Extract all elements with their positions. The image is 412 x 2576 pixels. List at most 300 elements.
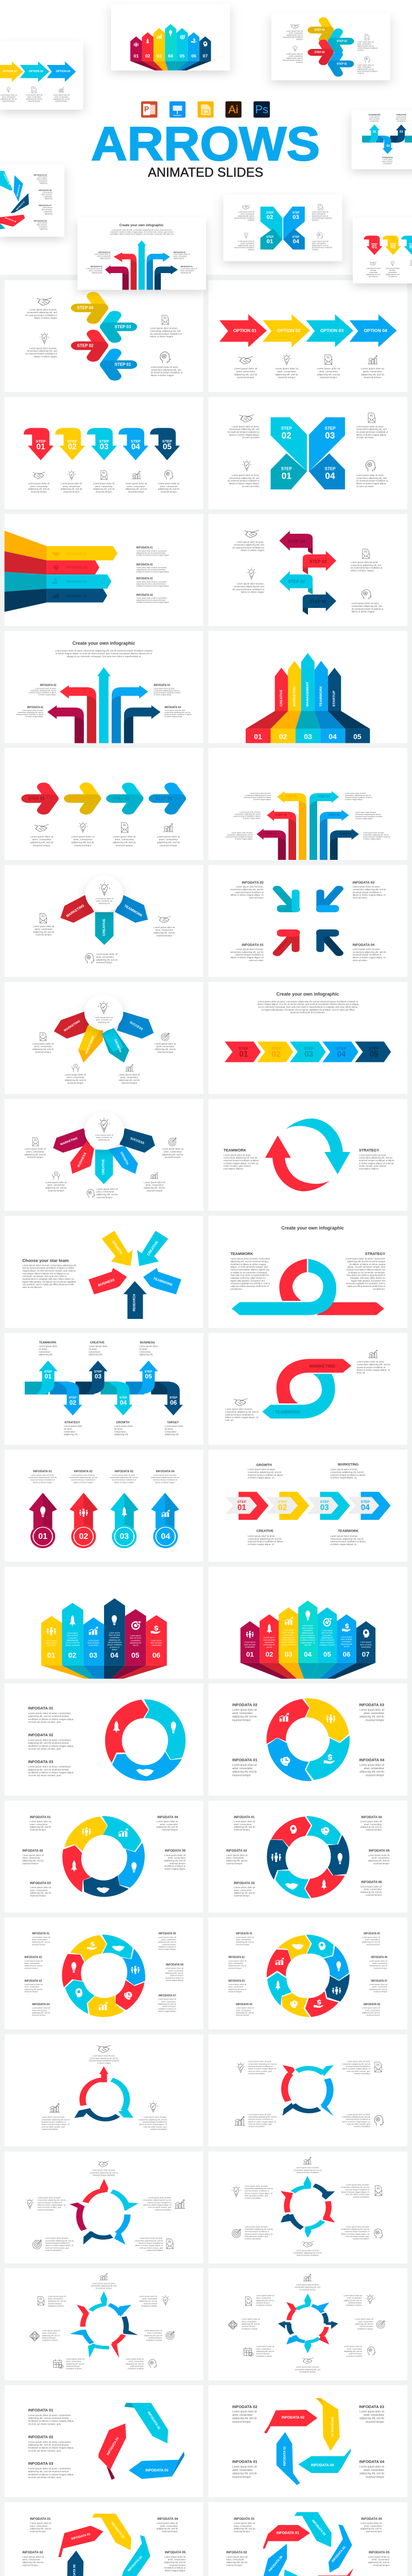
arrowheads: [70, 2179, 139, 2245]
text blocks: Lorem ipsum dolor sit amet, consectetur adipiscing elit, sed do eiusmod tempor: [368, 2555, 389, 2566]
arrows: chevrons: [312, 21, 349, 73]
chart: five columns: [246, 653, 370, 743]
chart: folded X: 01: [282, 470, 291, 481]
chart: ribbons: INFODATA 05: [3, 174, 10, 185]
headings and text: Lorem ipsum dolor sit amet, consectetur adipiscing elit, sed do eiusmod tempor incididunt ut labore et dolore magna aliqua. Ut enim ad minim: [230, 948, 264, 961]
icons and text blocks: Lorem ipsum dolor sit amet, consectetur adipiscing elit, sed do eiusmod tempor incididunt ut labore: [256, 2295, 274, 2307]
icons and text blocks: Lorem ipsum dolor sit amet, consectetur adipiscing elit, sed do eiusmod tempor incididunt ut labore: [126, 2358, 144, 2370]
headings and text: TEAMWORK: [39, 1341, 57, 1344]
icons and text blocks: Lorem ipsum dolor sit amet, consectetur adipiscing elit, sed do eiusmod tempor incididunt ut labore: [344, 2295, 362, 2307]
arrows: five converging: CREATIVE: [147, 1240, 159, 1257]
text blocks: Lorem ipsum dolor sit amet, consectetur adipiscing elit, sed do eiusmod tempor incididunt ut labore et dolore magna aliqua.: [164, 1854, 185, 1870]
icons and text blocks: [42, 2045, 167, 2130]
headings and text: GROWTH: [256, 1463, 272, 1467]
text blocks: INFODATA 02: [226, 2551, 247, 2554]
chart: ribbons: INFODATA 02: [282, 2416, 304, 2419]
arrowheads: [278, 2294, 338, 2353]
text blocks: Lorem ipsum dolor sit amet, consectetur adipiscing elit, sed do eiusmod tempor incididunt ut labore et dolore magna aliqua.: [355, 811, 383, 820]
chart: ribbons: INFODATA 06: [268, 2555, 284, 2572]
icons and text blocks: Lorem ipsum dolor sit amet, consectetur adipiscing elit, sed do eiusmod tempor incididunt ut labore et dolore magna aliqua. Ut enim ad minim veniam, quis nostrud exercitation: [134, 2238, 163, 2251]
chart: four perspective bands: [5, 531, 117, 612]
panel: slide 9 step chevrons: [5, 748, 203, 860]
text blocks: Lorem ipsum dolor sit amet, consectetur adipiscing elit, sed do eiusmod tempor: [24, 1984, 42, 1993]
arrows: five branches: [47, 667, 161, 743]
chart: six columns: Lorem ipsum dolor sit amet, consectetur: [45, 1639, 58, 1647]
text blocks: [224, 1148, 395, 1170]
text blocks: INFODATA 01: [30, 2517, 51, 2521]
arrows: five converging: GROWTH: [111, 1240, 123, 1255]
panel: slide 12 inward arrows: [209, 865, 407, 977]
text blocks: Lorem ipsum dolor sit amet, consectetur adipiscing elit, sed do eiusmod tempor: [157, 2522, 178, 2533]
icon: PowerPoint: [141, 101, 158, 117]
icons and text blocks: Lorem ipsum dolor sit amet, consectetur adipiscing elit, sed do eiusmod tempor incididunt ut labore: [357, 41, 377, 52]
text blocks: INFODATA 06: [166, 1963, 183, 1967]
icons and text blocks: Lorem ipsum dolor sit amet, consectetur adipiscing elit, sed do eiusmod tempor incididunt ut labore et dolore magna aliqua. Ut enim ad: [357, 1361, 390, 1374]
chart: six columns: Lorem ipsum dolor sit amet, consectetur: [88, 1639, 99, 1647]
icons and text blocks: Lorem ipsum dolor sit amet, consectetur adipiscing elit, sed do eiusmod tempor incididunt ut labore et dolore magna aliqua. Ut enim ad minim veniam, quis nostrud exercitation: [143, 2197, 171, 2211]
text blocks: [226, 1816, 390, 1897]
icons and text blocks: Lorem ipsum dolor sit amet, consectetur adipiscing elit, sed do eiusmod tempor incididunt ut labore: [48, 2295, 66, 2307]
labels: Lorem ipsum dolor sit amet, consectetur adipiscing elit, sed do eiusmod tempor incididunt ut labore et dolore magna aliqua.: [29, 688, 56, 696]
panel: slide 36 eight-arrow circle: [209, 2268, 407, 2380]
chart: X: 02: [267, 214, 273, 221]
icons and text blocks: Lorem ipsum dolor sit amet, consectetur adipiscing elit, sed do eiusmod tempor incididunt ut labore: [42, 2330, 60, 2342]
icons and text blocks: Lorem ipsum dolor sit amet, consectetur adipiscing elit, sed do eiusmod tempor incididunt ut labore et dolore magna: [352, 602, 383, 613]
text blocks: STRATEGY: [382, 156, 393, 159]
text blocks: INFODATA 01: [32, 1933, 49, 1936]
labels: INFODATA 02: [98, 251, 110, 253]
chart: ribbons: [264, 2398, 351, 2485]
chart: three petals around circle: Lorem ipsum dolor sit amet, consecte- tur adipiscing elit,: [95, 897, 113, 905]
icons and text blocks: Lorem ipsum dolor sit amet, consectetur adipiscing elit, sed do eiusmod tempor incididunt ut labore: [283, 53, 303, 63]
arrows: five converging: RESEARCH: [133, 1294, 136, 1311]
arrows: four options: OPTION 03: [320, 328, 344, 333]
text blocks: Lorem ipsum dolor sit amet, consectetur adipiscing elit, sed do eiusmod tempor: [22, 2555, 44, 2566]
icon: Illustrator: [226, 101, 242, 117]
chart: ribbons: INFODATA 02: [110, 2522, 125, 2539]
chart: seven columns: 03: [285, 1650, 293, 1658]
icons and text blocks: [26, 470, 182, 493]
text blocks: INFODATA 06: [371, 1956, 387, 1959]
arrows: four options: OPTION 04: [364, 328, 387, 333]
icons and text blocks: Lorem ipsum dolor sit amet, consectetur adipiscing elit, sed do eiusmod tempor incididunt: [294, 2249, 322, 2257]
chart: weaving band with six arrows: 05: [145, 1373, 152, 1380]
icons and text blocks: [30, 913, 177, 963]
chart: five petals: MARKETING: [60, 1137, 78, 1146]
icons and text blocks: [233, 204, 333, 249]
heading: Create your own infographic: [281, 1226, 344, 1231]
text blocks: Lorem ipsum dolor sit amet, consectetur adipiscing elit, sed do eiusmod tempor incididunt ut labore et dolore magna aliqua. Ut enim ad minim veniam, quis: [28, 2467, 74, 2479]
chart: seven columns: 02: [266, 1650, 273, 1658]
icons and text blocks: Lorem ipsum dolor sit amet, consectetur adipiscing elit, sed do eiusmod tempor: [32, 1042, 54, 1053]
chart: five columns: CREATIVE: [280, 689, 283, 707]
panel: slide 18 interlock arrows: [209, 1216, 407, 1328]
text blocks: Lorem ipsum dolor sit amet, consectetur adipiscing elit, sed do eiusmod tempor incididunt ut labore et dolore magna aliqua.: [226, 832, 253, 840]
chart: fan: 04: [168, 54, 173, 59]
panel: hero card X shape: [224, 195, 342, 261]
arrows: eight arcs: [289, 2306, 327, 2342]
labels: Lorem ipsum dolor sit amet, consectetur adipiscing elit,: [94, 253, 111, 260]
text blocks: INFODATA 02: [22, 1849, 43, 1853]
arrows: six branches: STEP 04: [318, 795, 330, 799]
arrows: five chevrons: 02: [272, 1050, 281, 1059]
text blocks: Lorem ipsum dolor sit amet, consectetur adipiscing elit, sed do eiusmod tempor incididunt ut labore et dolore magna aliqua.: [363, 832, 390, 840]
text blocks: Lorem ipsum dolor sit amet, consectetur adipiscing elit, sed do eiusmod tempor: [369, 1960, 387, 1969]
panel: hero card option arrows: [0, 41, 83, 110]
panel: hero card ribbons: [0, 164, 64, 236]
icons and text blocks: Lorem ipsum dolor sit amet, consectetur adipiscing elit, sed do eiusmod tempor: [26, 94, 42, 102]
chart: ribbons: INFODATA 03: [330, 2417, 333, 2437]
headings and text: MARKETING: [338, 1463, 358, 1466]
headings and text: INFODATA 04: [156, 1470, 175, 1473]
text blocks: TEAMWORK: [224, 1148, 247, 1153]
chart: six columns: Lorem ipsum dolor sit amet, consectetur adipiscing elit, sed do eiusmod tempor incididunt ut labore et dolore: [107, 1632, 122, 1651]
chart: folded X: STEP: [281, 426, 292, 431]
panel: slide 5 perspective bands: [5, 514, 203, 626]
text blocks: Lorem ipsum dolor sit amet, consectetur adipiscing elit, sed do eiusmod tempor: [234, 1820, 255, 1831]
text blocks: Lorem ipsum dolor sit amet, consectetur adipiscing elit, sed do eiusmod tempor: [30, 2522, 52, 2533]
text blocks: Lorem ipsum dolor sit amet, consectetur adipiscing elit, sed do eiusmod tempor: [236, 1936, 254, 1945]
text blocks: Lorem ipsum dolor sit amet, consectetur adipiscing elit, sed do eiusmod tempor: [234, 2522, 255, 2533]
chart: four petals: Lorem ipsum dolor sit amet, consecte- tur adipiscing elit,: [95, 1016, 113, 1023]
panel: hero card 7-arrow fan: [111, 4, 230, 71]
chart: folded X: 03: [325, 430, 335, 440]
chart: ring: [266, 1698, 350, 1781]
arrows: zigzag: STEP 02: [288, 579, 305, 584]
icons and text blocks: Lorem ipsum dolor sit amet, consectetur adipiscing elit, sed do eiusmod tempor: [118, 1073, 140, 1084]
arrows: five chevrons: STEP: [238, 1046, 249, 1051]
arrows: open chevrons: STEP: [237, 1500, 247, 1504]
text blocks: [232, 2404, 385, 2480]
text blocks: Lorem ipsum dolor sit amet, consectetur adipiscing elit, sed do eiusmod tempor: [362, 2007, 380, 2016]
panel: slide 31 three-arrow circle: [5, 2035, 203, 2146]
arrows: options: OPTION 03: [29, 70, 43, 73]
arrows: five chevrons: 04: [337, 1050, 346, 1059]
labels: INFODATA 01: [91, 265, 102, 267]
chart: fan: 01: [134, 54, 139, 59]
text blocks: INFODATA 03: [28, 1759, 53, 1764]
icon: PowerPoint: P: [144, 106, 149, 114]
text blocks: Lorem ipsum dolor sit amet, consectetur: [382, 159, 393, 165]
icons and text blocks: [366, 260, 412, 275]
text blocks: Lorem ipsum dolor sit amet, consectetur adipiscing elit, sed do eiusmod tempor: [360, 2522, 382, 2533]
arrows: open chevrons: 04: [361, 1503, 370, 1512]
chart: five petals: CREATIVE: [102, 1159, 106, 1175]
text blocks: INFODATA 06: [39, 189, 52, 191]
text blocks: INFODATA 04: [361, 1816, 382, 1819]
arrows: open chevrons: STEP: [320, 1500, 329, 1504]
chart: four perspective bands: INFODATA 04: [66, 595, 87, 598]
icons and text blocks: Lorem ipsum dolor sit amet, consectetur adipiscing elit, sed do eiusmod tempor incididunt ut labore et dolore magna aliqua. Ut enim ad minim veniam, quis nostrud exercitation: [245, 2185, 273, 2199]
arrows: six arcs: [287, 2185, 329, 2228]
arrowheads: [74, 2066, 133, 2118]
chart: six columns: Lorem ipsum dolor sit amet, consectetur adipiscing elit, sed do eiusmod tempor incididunt: [65, 1632, 80, 1646]
chart: X: STEP: [266, 236, 273, 239]
chart: five columns: 03: [304, 732, 312, 740]
panel: slide 17 star team arrows: [5, 1216, 203, 1328]
labels: INFODATA 03: [153, 684, 170, 687]
icons and text blocks: [234, 2060, 384, 2128]
text blocks: Lorem ipsum dolor sit amet, consectetur adipiscing elit, sed do eiusmod tempor incididunt ut labore et dolore magna aliqua.: [136, 597, 169, 603]
chart: seven columns: Lorem ipsum dolor sit amet, consectetur adipiscing elit, sed do: [340, 1636, 352, 1648]
chart: weaving band with six arrows: 01: [45, 1373, 52, 1380]
icons and text blocks: [30, 1032, 178, 1083]
arrows: two curved: [265, 1118, 350, 1191]
text blocks: INFODATA 04: [361, 2517, 382, 2521]
arrowheads: [282, 2065, 334, 2116]
headings and text: Lorem ipsum dolor sit amet, consectetur adipiscing elit, sed do eiusmod tempor incididunt ut labore et dolore magna: [151, 1474, 179, 1483]
icons and text blocks: [232, 2157, 383, 2257]
headings and text: BUSINESS: [140, 1341, 155, 1344]
chart: weaving band with six arrows: STEP: [169, 1397, 177, 1400]
icons and text blocks: Lorem ipsum dolor sit amet, consectetur adipiscing elit, sed do eiusmod tempor: [1, 94, 17, 102]
text blocks: INFODATA 01: [234, 2517, 255, 2521]
text blocks: Lorem ipsum dolor sit amet, consectetur adipiscing elit, sed do eiusmod tempor: [232, 1708, 257, 1722]
headings and text: Lorem ipsum dolor sit amet, consectetur adipiscing elit, sed do eiusmod tempor incididunt ut labore et dolore magna aliqua. Ut: [330, 1468, 366, 1479]
text blocks: INFODATA 07: [39, 204, 52, 207]
arrows: open chevrons: STEP: [278, 1500, 287, 1504]
headings and text: Lorem ipsum dolor sit amet, consectetur adipiscing elit, sed do eiusmod tempor incididunt ut labore et dolore magna aliqua. Ut: [248, 1468, 283, 1479]
panel: slide 26 four-part ring: [209, 1684, 407, 1795]
panel: slide 37 three ribbons: [5, 2385, 203, 2497]
headings and text: Lorem ipsum dolor sit amet, consectetur adipiscing elit,: [114, 1425, 133, 1436]
text blocks: Lorem ipsum dolor sit amet, consectetur adipiscing elit, sed do eiusmod tempor: [226, 2555, 248, 2566]
icons and text blocks: Lorem ipsum dolor sit amet, consectetur adipiscing elit, sed do eiusmod tempor: [234, 367, 257, 379]
text blocks: Lorem ipsum dolor sit amet, consectetur adipiscing elit, sed do eiusmod tempor: [359, 1708, 384, 1722]
text blocks: INFODATA 02: [228, 1956, 245, 1959]
arrows: four chevrons: STEP 02: [77, 343, 94, 348]
icons and text blocks: [0, 87, 70, 103]
labels: Lorem ipsum dolor sit amet, consectetur adipiscing elit, sed do eiusmod tempor incididunt ut labore et dolore magna aliqua.: [16, 709, 43, 718]
icons and text blocks: [27, 822, 183, 848]
headings and text: Lorem ipsum dolor sit amet, consectetur adipiscing elit,: [39, 1345, 57, 1356]
arrows: open chevrons: STEP: [361, 1500, 370, 1504]
arrows: six branches: STEP 05: [329, 814, 340, 817]
icons and text blocks: Lorem ipsum dolor sit amet, consectetur adipiscing elit, sed do eiusmod tempor incididunt ut labore: [357, 64, 377, 75]
text blocks: Lorem ipsum dolor sit amet, consectetur adipiscing elit, sed do eiusmod tempor: [362, 1936, 380, 1945]
icon: Google Slides: [198, 101, 214, 117]
headings and text: CREATIVE: [90, 1341, 105, 1344]
arrows: six branches: STEP 01: [265, 833, 277, 836]
headings and text: Lorem ipsum dolor sit amet, consectetur adipiscing elit, sed do eiusmod tempor incididunt ut labore et dolore magna: [28, 1474, 57, 1483]
text blocks: INFODATA 05: [364, 1933, 380, 1936]
text blocks: Lorem ipsum dolor sit amet, consectetur adipiscing elit, sed do eiusmod tempor: [228, 1960, 246, 1969]
chart: four perspective bands: INFODATA 02: [66, 566, 87, 569]
text blocks: [33, 174, 53, 229]
arrows: four options: OPTION 01: [233, 328, 256, 333]
chart: fan: 03: [157, 54, 162, 59]
chart: five columns: 04: [329, 732, 337, 740]
chart: seven columns: 05: [323, 1650, 331, 1658]
text blocks: Lorem ipsum dolor sit amet, consectetur adipiscing elit, sed do eiusmod tempor incididunt ut labore et dolore magna aliqua. Ut enim ad minim veniam, quis: [28, 1712, 74, 1723]
arrows: five chevrons: 01: [239, 1050, 248, 1059]
chart: six columns: 04: [110, 1651, 118, 1659]
labels: Lorem ipsum dolor sit amet, consectetur adipiscing elit,: [181, 268, 197, 274]
icons and text blocks: [225, 1350, 390, 1422]
chart: ribbons: INFODATA 02: [311, 2519, 326, 2537]
arrows: six branches: STEP 03: [285, 795, 297, 799]
text blocks: INFODATA 02: [22, 2551, 43, 2554]
text blocks: Lorem ipsum dolor sit amet, consectetur adipiscing elit, sed do eiusmod tempor incididunt ut labore et dolore magna aliqua.: [165, 1968, 183, 1981]
chart: fan: 05: [180, 54, 185, 59]
icons and text blocks: Lorem ipsum dolor sit amet, consectetur adipiscing elit, sed do eiusmod tempor: [96, 1188, 118, 1198]
arrows: five converging: BUSINESS: [97, 1278, 115, 1287]
panel: slide 3 down ribbons: [5, 397, 203, 509]
icon: Illustrator: Ai: [228, 103, 238, 116]
icons and text blocks: Lorem ipsum dolor sit amet, consectetur adipiscing elit, sed do eiusmod tempor incididunt: [90, 2170, 118, 2176]
chart: ribbons: INFODATA 03: [128, 2555, 143, 2572]
arrows: interlock: [232, 1259, 384, 1315]
icons and text blocks: [231, 530, 384, 614]
arrows: five ribbons: STEP: [99, 439, 109, 444]
text blocks: [225, 792, 391, 840]
text blocks: Lorem ipsum dolor sit amet, consectetur adipiscing elit, sed do eiusmod tempor: [359, 2410, 384, 2424]
text blocks: INFODATA 01: [232, 1757, 258, 1762]
chart: four petals: INVESTMENT: [85, 1035, 96, 1055]
panel: slide 14 chevron process: [209, 982, 407, 1094]
chart: ring: [62, 1816, 145, 1897]
text blocks: INFODATA 03: [234, 1882, 255, 1885]
chart: X: 01: [267, 239, 273, 245]
arrows: chevrons: STEP 04: [315, 29, 325, 32]
chart: six columns: Lorem ipsum dolor sit amet, consectetur adipiscing elit, sed do: [130, 1635, 142, 1647]
text blocks: Lorem ipsum dolor sit amet, consectetur adipiscing elit, sed do eiusmod tempor: [359, 1764, 384, 1777]
icons and text blocks: Lorem ipsum dolor sit amet, consectetur adipiscing elit, sed do eiusmod tempor incididunt ut labore: [66, 2358, 84, 2370]
text blocks: INFODATA 03: [359, 2404, 384, 2409]
icons and text blocks: Lorem ipsum dolor sit amet, consectetur adipiscing elit, sed do eiusmod tempor incididunt ut labore et dolore magna aliqua. Ut enim ad minim veniam, quis nostrud exercitation: [341, 2184, 369, 2198]
text blocks: TEAMWORK: [368, 113, 381, 116]
text blocks: Lorem ipsum dolor sit amet, consectetur adipiscing elit, sed do eiusmod tempor incididunt ut labore et dolore magna aliqua.: [136, 567, 169, 573]
arrows: four badge arrows: 03: [119, 1532, 129, 1541]
chart: four petals: [54, 994, 153, 1063]
chart: ribbons: [0, 171, 29, 229]
headings and text: INFODATA 03: [115, 1470, 133, 1473]
text blocks: STRATEGY: [365, 1251, 385, 1256]
arrows: five ribbons: [21, 428, 180, 460]
icons and text blocks: Lorem ipsum dolor sit amet, consectetur adipiscing elit, sed do eiusmod tempor: [93, 482, 114, 493]
chart: ribbons: INFODATA 08: [5, 217, 16, 223]
text blocks: INFODATA 02: [24, 1956, 42, 1959]
panel: hero card weaving band: [352, 110, 412, 169]
arrows: four chevrons: STEP 03: [113, 796, 130, 801]
arrows: four inward: STEP 01: [278, 940, 288, 951]
text blocks: INFODATA 03: [24, 1979, 42, 1982]
labels: INFODATA 01: [27, 706, 44, 709]
arrows: five chevrons: STEP: [369, 1046, 379, 1051]
chart: weaving band with six arrows: STEP: [145, 1370, 152, 1374]
arrows: options: OPTION 02: [3, 70, 17, 73]
chart: ribbons: INFODATA 04: [311, 2464, 334, 2467]
chart: five columns: 01: [254, 732, 262, 740]
text blocks: INFODATA 04: [157, 2517, 178, 2521]
panel: slide 2 option arrows: [209, 280, 407, 392]
arrows: five ribbons: STEP: [36, 439, 46, 444]
arrows: four inward: STEP 02: [279, 891, 289, 902]
text blocks: Lorem ipsum dolor sit amet, consectetur adipiscing elit, sed do eiusmod tempor: [226, 1854, 248, 1865]
arrows: four badge arrows: 02: [79, 1532, 88, 1541]
text blocks: Lorem ipsum dolor sit amet, consectetur adipiscing elit, sed do eiusmod tempor: [24, 1960, 42, 1969]
arrows: seven arcs: [83, 2304, 126, 2348]
chart: four petals: SUCCESS: [129, 1021, 143, 1031]
panel: slide 27 five-part ring: [5, 1801, 203, 1912]
arrows: ribbons: [364, 235, 412, 255]
arrows: options: OPTION 04: [56, 70, 70, 73]
panel: slide 19 weaving band: [5, 1333, 203, 1445]
headings and text: Lorem ipsum dolor sit amet, consectetur adipiscing elit,: [89, 1345, 107, 1356]
icons and text blocks: Lorem ipsum dolor sit amet, consectetur adipiscing elit, sed do eiusmod tempor incididunt ut labore: [234, 211, 254, 222]
chart: weaving band: [362, 125, 412, 154]
arrows: open chevrons: [226, 1492, 391, 1520]
text blocks: INFODATA 04: [157, 1816, 178, 1819]
subtitle: ANIMATED SLIDES: ANIMATED SLIDES: [148, 165, 263, 180]
panel: slide 21 badge arrows: [5, 1450, 203, 1562]
text blocks: Lorem ipsum dolor sit amet, consectetur adipiscing elit, sed do eiusmod tempor: [360, 1885, 382, 1896]
text blocks: INFODATA 03: [228, 1979, 245, 1982]
arrows: open chevrons: 01: [237, 1503, 246, 1512]
chart: five columns: 05: [353, 732, 362, 740]
chart: ribbons: [98, 2403, 184, 2480]
text blocks: INFODATA 02: [28, 2434, 53, 2439]
arrows: four chevrons: STEP 03: [115, 325, 131, 329]
icons and text blocks: Lorem ipsum dolor sit amet, consectetur adipiscing elit, sed do eiusmod tempor incididunt ut labore et dolore magna aliqua. Ut enim ad: [225, 1408, 259, 1421]
icons and text blocks: Lorem ipsum dolor sit amet, consectetur adipiscing elit, sed do eiusmod tempor incididunt ut labore et dolore magna aliqua. Ut enim ad minim veniam, quis nostrud exercitation: [45, 2238, 74, 2251]
chart: ribbons: INFODATA 06: [16, 184, 21, 197]
panel: slide 30 eight-part ring: [209, 1918, 407, 2029]
icons and text blocks: Lorem ipsum dolor sit amet, consectetur adipiscing elit, sed do eiusmod tempor incididunt ut labore: [355, 2318, 373, 2330]
text blocks: INFODATA 04: [32, 2003, 49, 2006]
arrows: six branches: STEP 06: [340, 833, 351, 836]
chart: folded X: 04: [325, 470, 335, 481]
icons and text blocks: [227, 413, 389, 488]
arrows: four badge arrows: [29, 1493, 179, 1548]
arrows: six branches: [256, 791, 359, 860]
text blocks: [28, 1706, 77, 1777]
text blocks: Lorem ipsum dolor sit amet, consectetur adipiscing elit, sed do eiusmod tempor: [30, 1820, 52, 1831]
arrows: open chevrons: 03: [320, 1503, 329, 1512]
icons and text blocks: Lorem ipsum dolor sit amet, consectetur adipiscing elit, sed do eiusmod tempor incididunt ut labore et dolore magna aliqua. Ut enim ad minim veniam, quis nostrud exercitation: [341, 2226, 369, 2240]
panel: slide 24 seven tall arrows: [209, 1567, 407, 1679]
headings and text: Lorem ipsum dolor sit amet, consectetur adipiscing elit,: [139, 1345, 158, 1356]
icons and text blocks: Lorem ipsum dolor sit amet, consectetur adipiscing elit, sed do eiusmod tempor incididunt ut labore et dolore magna: [89, 2055, 119, 2064]
chart: folded X: [271, 417, 345, 489]
icons and text blocks: [30, 2274, 175, 2370]
headings and text: [230, 881, 386, 962]
headings and text: Lorem ipsum dolor sit amet, consectetur adipiscing elit, sed do eiusmod tempor incididunt ut labore et dolore magna: [110, 1474, 138, 1483]
icons and text blocks: Lorem ipsum dolor sit amet, consectetur adipiscing elit, sed do eiusmod tempor incididunt ut labore et dolore magna: [150, 327, 182, 338]
icons and text blocks: Lorem ipsum dolor sit amet, consectetur adipiscing elit, sed do eiusmod tempor: [162, 1148, 183, 1159]
text blocks: [226, 2517, 390, 2576]
arrows: ribbons: STEP: [390, 243, 396, 245]
chart: five petals: [53, 1112, 155, 1184]
text blocks: INFODATA 01: [28, 2408, 54, 2412]
chart: seven columns: Lorem ipsum dolor sit amet, consectetur adipiscing elit, sed do eiusmod tempor incididunt ut labore et dolore magna aliqua. Ut enim ad: [300, 1625, 315, 1646]
icons and text blocks: Lorem ipsum dolor sit amet, consectetur adipiscing elit, sed do eiusmod tempor: [153, 926, 175, 937]
headings and text: [28, 1470, 179, 1484]
icons and text blocks: Lorem ipsum dolor sit amet, consectetur adipiscing elit, sed do eiusmod tempor incididunt ut labore: [234, 241, 254, 250]
headings and text: INFODATA 02: [242, 881, 264, 885]
icons and text blocks: Lorem ipsum dolor sit amet, consectetur adipiscing elit, sed do eiusmod tempor incididunt ut labore et dolore magna aliqua. Ut enim ad minim veniam, quis nostrud exercitation: [38, 2197, 66, 2211]
text blocks: INFODATA 07: [159, 1994, 176, 1997]
panel: slide 16 cycle arrows: [209, 1099, 407, 1211]
labels: INFODATA 02: [40, 684, 57, 687]
icon: Keynote: [169, 101, 185, 117]
chart: five petals: BUSINESS: [77, 1153, 87, 1168]
arrowheads: [70, 2292, 138, 2358]
arrows: four chevrons: STEP 01: [28, 796, 45, 801]
icons and text blocks: Lorem ipsum dolor sit amet, consectetur adipiscing elit, sed do eiusmod tempor: [154, 1042, 176, 1053]
text blocks: INFODATA 06: [361, 1880, 382, 1884]
arrows: four inward: [277, 889, 339, 953]
